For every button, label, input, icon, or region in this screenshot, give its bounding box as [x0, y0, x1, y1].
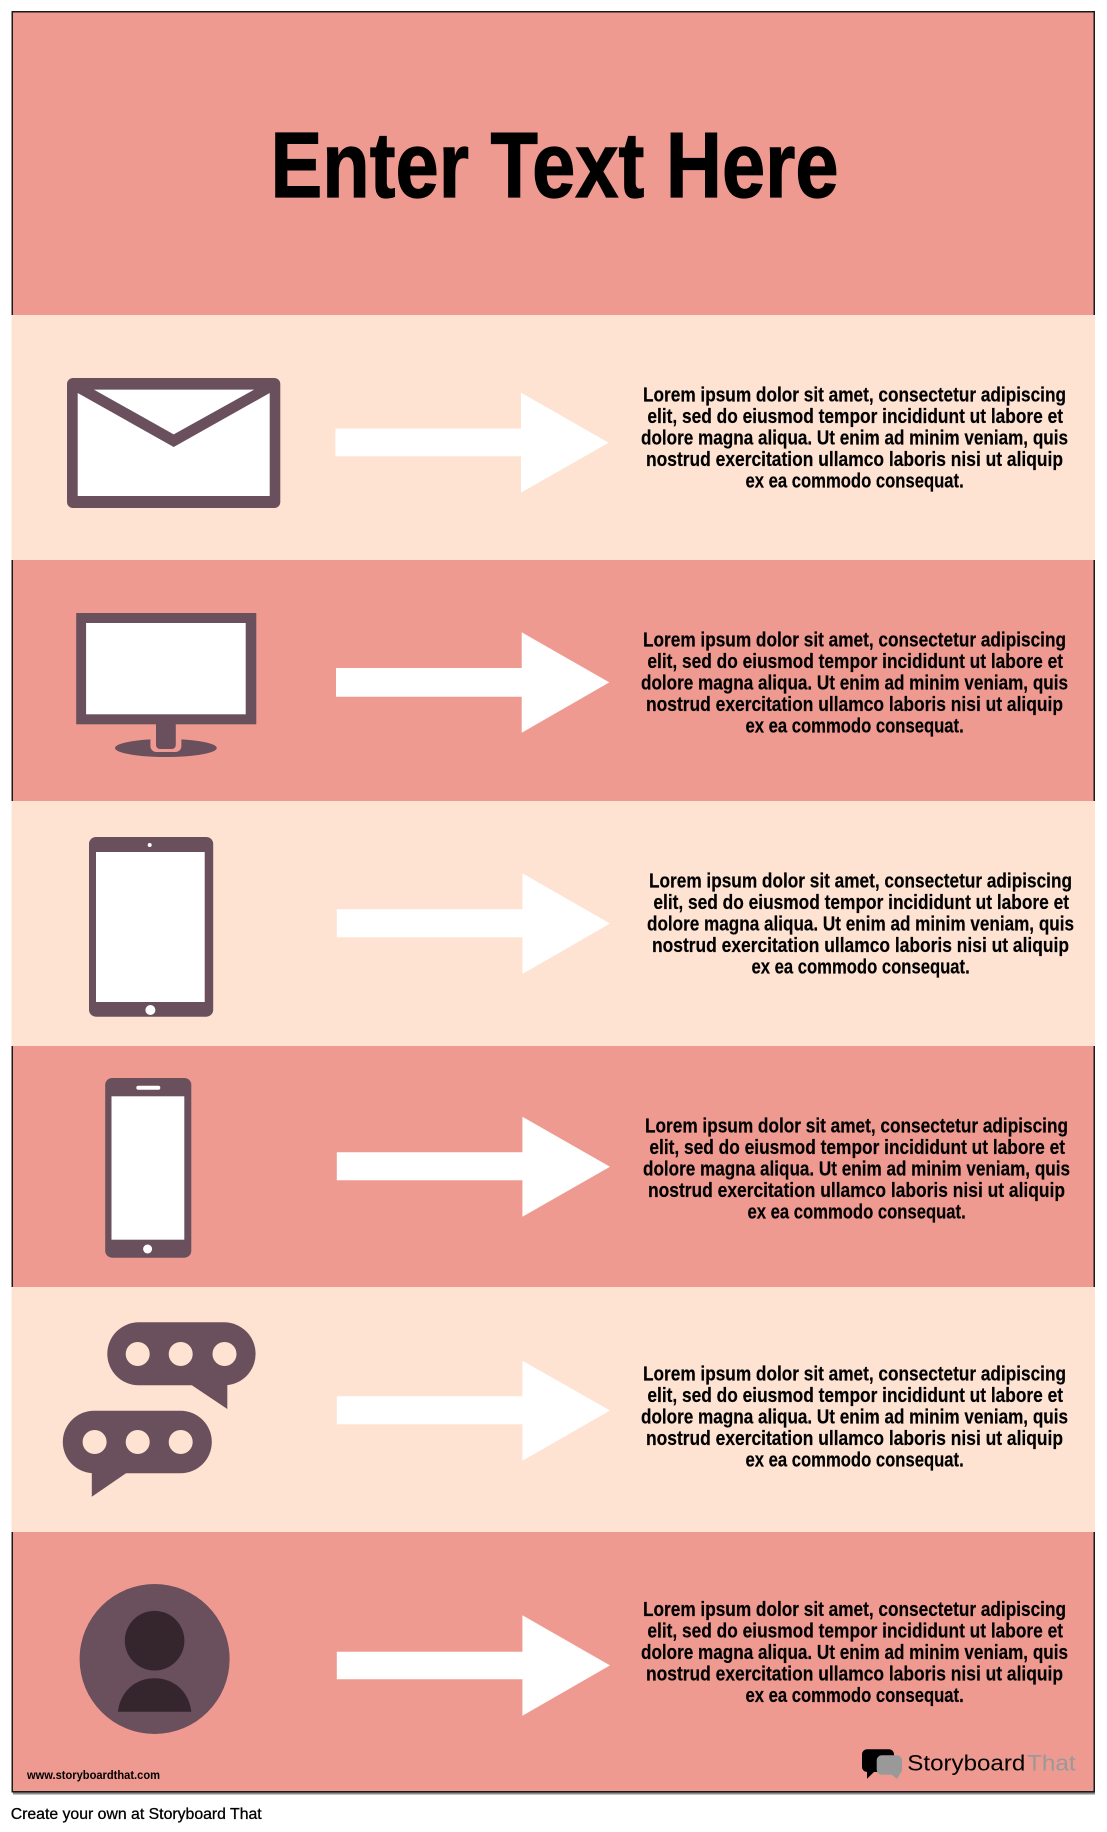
icon: tablet [89, 837, 213, 1017]
text block [641, 1364, 1068, 1472]
footer credit: Create your own at Storyboard That [11, 1806, 262, 1823]
arrow [337, 873, 610, 974]
panel: row 1 email [12, 315, 1095, 560]
arrow [337, 1615, 610, 1716]
website url: www.storyboardthat.com [26, 1768, 160, 1782]
text block: ex ea commodo consequat. [746, 715, 964, 737]
icon: monitor [76, 613, 256, 757]
icon: chat bubbles [63, 1322, 256, 1497]
text block [643, 1116, 1070, 1224]
logo: Storyboard That: That [1027, 1751, 1076, 1776]
text block: ex ea commodo consequat. [746, 1450, 964, 1472]
logo wordmark: Storyboard [907, 1751, 1025, 1776]
text block: ex ea commodo consequat. [746, 1685, 964, 1707]
icon: user avatar [80, 1584, 230, 1734]
icon: phone [105, 1078, 191, 1258]
text block: ex ea commodo consequat. [746, 470, 964, 492]
logo: Storyboard That [862, 1749, 1076, 1779]
arrow [335, 393, 609, 493]
icon: envelope [67, 378, 280, 508]
text block [641, 384, 1068, 492]
panel: row 6 profile [80, 1584, 1068, 1734]
text block [647, 870, 1074, 978]
arrow [337, 1361, 610, 1461]
arrow [336, 632, 609, 733]
text block: ex ea commodo consequat. [748, 1202, 966, 1224]
text block [641, 630, 1068, 738]
panel: row 2 desktop [13, 560, 1094, 801]
panel: row 3 tablet [12, 801, 1095, 1046]
panel: row 4 phone [13, 1046, 1094, 1287]
title: Enter Text Here [270, 113, 838, 217]
arrow [337, 1117, 610, 1217]
panel: row 5 chat [12, 1287, 1095, 1532]
text block [641, 1599, 1068, 1707]
text block: ex ea commodo consequat. [752, 956, 970, 978]
icon: logo speech bubbles [862, 1749, 902, 1779]
